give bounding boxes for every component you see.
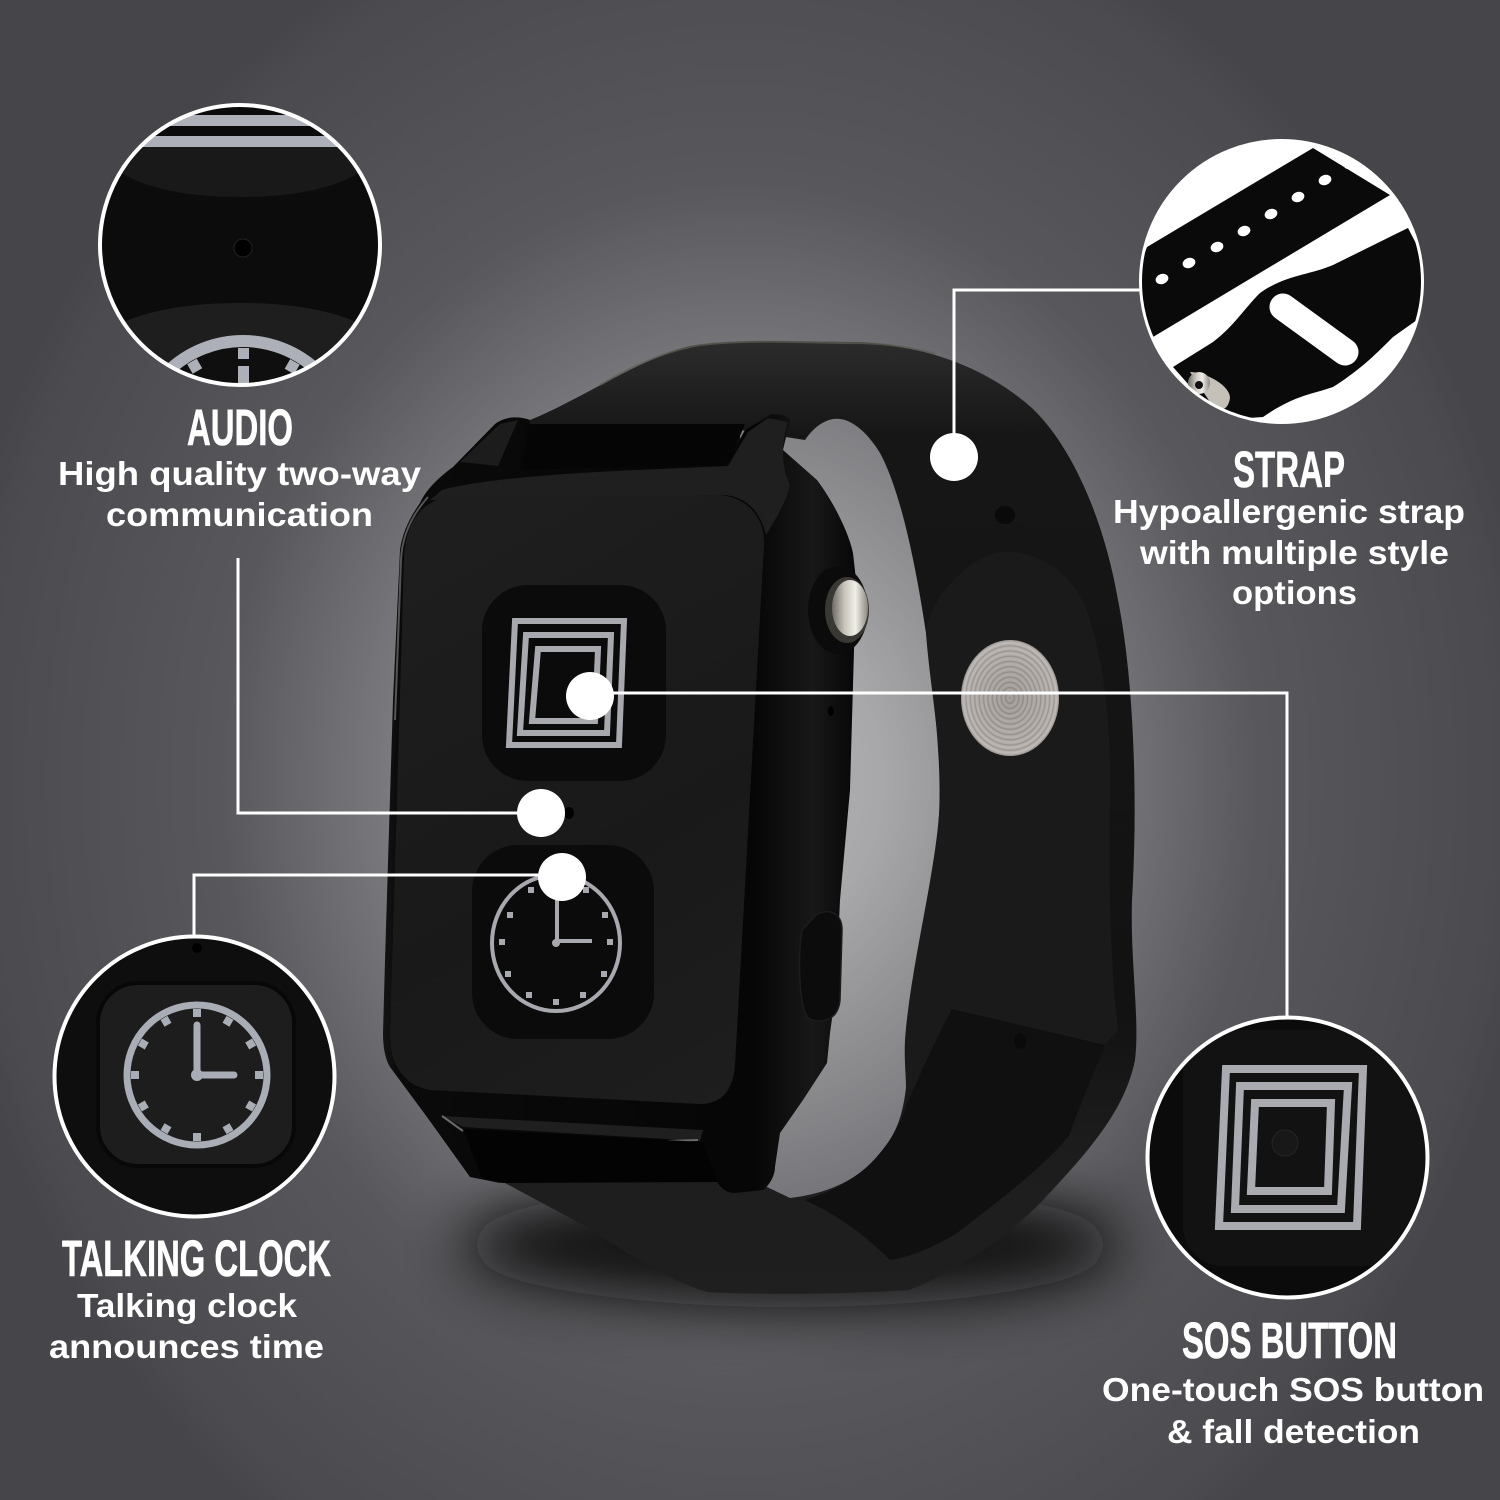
sos description: & fall detection	[1167, 1413, 1420, 1450]
watch strap	[440, 341, 1136, 1294]
sos description: One-touch SOS button	[1102, 1371, 1484, 1408]
audio description: communication	[106, 496, 373, 533]
left edge highlight	[395, 497, 428, 720]
clock pad on watch	[472, 845, 654, 1039]
panel: sos button	[1102, 1018, 1484, 1450]
talking clock detail circle	[54, 936, 334, 1216]
inner strap loop	[905, 552, 1118, 1120]
strap description: with multiple style	[1139, 534, 1449, 571]
strap description	[1113, 493, 1465, 611]
panel: audio	[58, 90, 422, 557]
strap holes	[995, 506, 1015, 524]
watch case	[383, 414, 869, 1193]
watch drop shadow	[460, 1183, 1120, 1307]
panel: talking clock	[49, 936, 334, 1365]
gap behind strap	[740, 419, 940, 1198]
strap keeper fold	[804, 1009, 1105, 1260]
metal sensor disc	[961, 640, 1059, 756]
marker dots	[517, 433, 978, 901]
strap description: Hypoallergenic strap	[1113, 493, 1465, 530]
lower rim	[442, 1116, 703, 1141]
audio detail circle	[98, 103, 382, 387]
SOS pad on watch	[482, 585, 666, 781]
side button	[800, 912, 842, 1021]
strap description: options	[1232, 574, 1357, 611]
watch product illustration	[383, 341, 1136, 1294]
strap detail circle	[1130, 140, 1440, 422]
connector lines	[194, 290, 1287, 1016]
audio description	[58, 455, 422, 533]
watch face	[390, 495, 764, 1104]
talking clock description: Talking clock	[77, 1287, 298, 1324]
strap heading: STRAP	[1233, 441, 1345, 498]
speaker hole	[564, 807, 574, 819]
upper rim and lug	[430, 418, 790, 535]
talking clock description: announces time	[49, 1328, 324, 1365]
panel: strap	[1113, 140, 1465, 611]
crown	[808, 566, 869, 654]
sos description	[1102, 1371, 1484, 1450]
sos detail circle	[1148, 1018, 1445, 1298]
lower strap slot	[463, 1129, 717, 1183]
audio heading: AUDIO	[187, 399, 293, 456]
talking clock heading: TALKING CLOCK	[62, 1230, 331, 1287]
audio description: High quality two-way	[58, 455, 422, 492]
talking clock description	[49, 1287, 324, 1365]
